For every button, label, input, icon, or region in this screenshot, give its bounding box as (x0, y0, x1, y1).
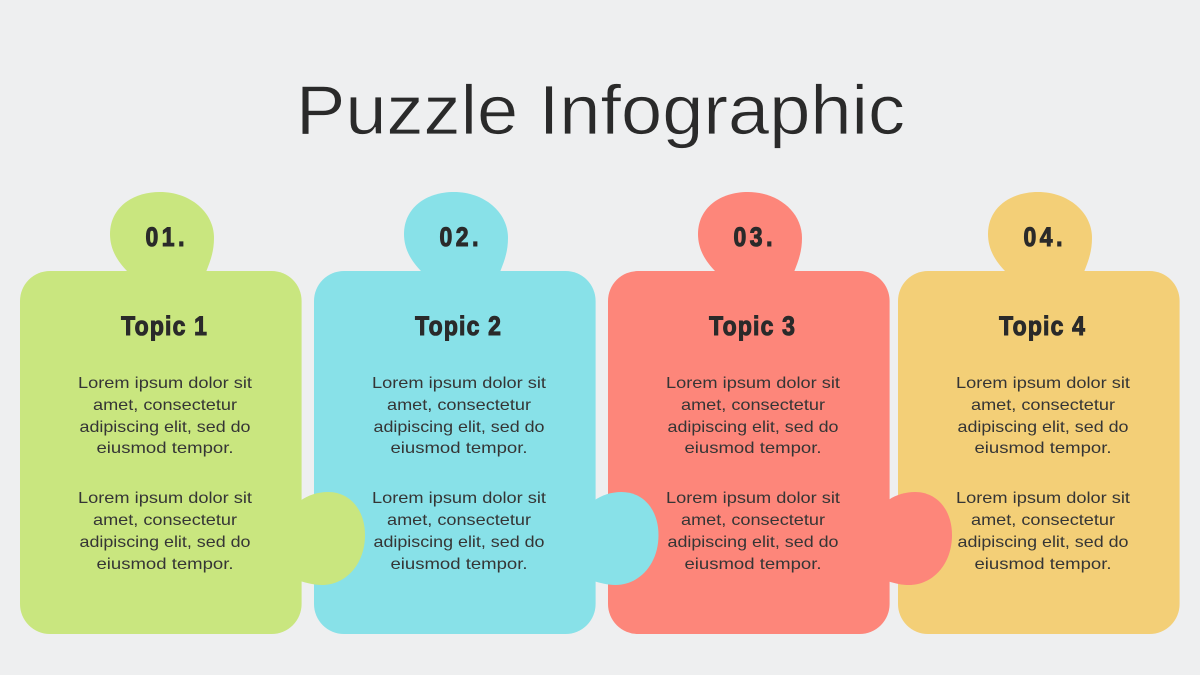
text block: topic 1 first paragraph: Lorem ipsum dolor sit (78, 375, 253, 392)
text block: topic 2 second paragraph: eiusmod tempor. (390, 556, 528, 573)
text block: topic 2 first paragraph: adipiscing elit, sed do (374, 419, 545, 436)
text block: topic 1 second paragraph: Lorem ipsum dolor sit (78, 490, 253, 507)
text block: topic 3 second paragraph: adipiscing elit, sed do (668, 534, 839, 551)
text block: topic 4 second paragraph: adipiscing elit, sed do (958, 534, 1129, 551)
text block: topic 2 second paragraph: adipiscing elit, sed do (374, 534, 545, 551)
puzzle piece: topic 1 (20, 192, 365, 634)
heading: topic 1: Topic 1 (121, 311, 207, 341)
text block: topic 1 second paragraph (78, 490, 253, 573)
text block: topic 2 first paragraph: eiusmod tempor. (390, 440, 528, 457)
text block: topic 3 first paragraph: eiusmod tempor. (684, 440, 822, 457)
text block: topic 4 first paragraph (956, 375, 1131, 457)
panel: topic 2 (314, 192, 658, 634)
text block: topic 4 first paragraph: adipiscing elit, sed do (958, 419, 1129, 436)
text block: topic 2 second paragraph (372, 490, 547, 573)
text block: topic 1 second paragraph: eiusmod tempor. (96, 556, 234, 573)
panel: topic 1 (20, 192, 365, 634)
text block: topic 3 first paragraph: Lorem ipsum dolor sit (666, 375, 841, 392)
text block: topic 3 first paragraph: amet, consectetur (681, 397, 826, 414)
text block: topic 3 first paragraph (666, 375, 841, 457)
text block: topic 1 first paragraph (78, 375, 253, 457)
panel: topic 4 (898, 192, 1180, 634)
number 04: 04. (1023, 222, 1063, 252)
text block: topic 4 first paragraph: eiusmod tempor. (974, 440, 1112, 457)
text block: topic 3 second paragraph: eiusmod tempor. (684, 556, 822, 573)
number 03: 03. (733, 222, 773, 252)
heading: topic 2: Topic 2 (415, 311, 501, 341)
heading: topic 4: Topic 4 (999, 311, 1085, 341)
text block: topic 4 second paragraph: Lorem ipsum dolor sit (956, 490, 1131, 507)
text block: topic 3 second paragraph (666, 490, 841, 573)
number 02: 02. (439, 222, 479, 252)
text block: topic 2 first paragraph: Lorem ipsum dolor sit (372, 375, 547, 392)
text block: topic 4 second paragraph: eiusmod tempor. (974, 556, 1112, 573)
text block: topic 4 second paragraph (956, 490, 1131, 573)
text block: topic 3 second paragraph: Lorem ipsum dolor sit (666, 490, 841, 507)
puzzle piece: topic 3 (608, 192, 952, 634)
text block: topic 4 first paragraph: amet, consectetur (971, 397, 1116, 414)
text block: topic 2 second paragraph: amet, consectetur (387, 512, 532, 529)
text block: topic 3 first paragraph: adipiscing elit, sed do (668, 419, 839, 436)
text block: topic 4 second paragraph: amet, consectetur (971, 512, 1116, 529)
text block: topic 1 first paragraph: adipiscing elit, sed do (80, 419, 251, 436)
heading: topic 3: Topic 3 (709, 311, 795, 341)
panel: topic 3 (608, 192, 952, 634)
text block: topic 4 first paragraph: Lorem ipsum dolor sit (956, 375, 1131, 392)
number 01: 01. (145, 222, 185, 252)
text block: topic 3 second paragraph: amet, consectetur (681, 512, 826, 529)
text block: topic 1 first paragraph: amet, consectetur (93, 397, 238, 414)
text block: topic 2 second paragraph: Lorem ipsum dolor sit (372, 490, 547, 507)
text block: topic 2 first paragraph: amet, consectetur (387, 397, 532, 414)
text block: topic 1 first paragraph: eiusmod tempor. (96, 440, 234, 457)
text block: topic 2 first paragraph (372, 375, 547, 457)
puzzle piece: topic 4 (898, 192, 1180, 634)
text block: topic 1 second paragraph: amet, consectetur (93, 512, 238, 529)
text block: topic 1 second paragraph: adipiscing elit, sed do (80, 534, 251, 551)
puzzle piece: topic 2 (314, 192, 658, 634)
title: Puzzle Infographic (296, 71, 905, 149)
